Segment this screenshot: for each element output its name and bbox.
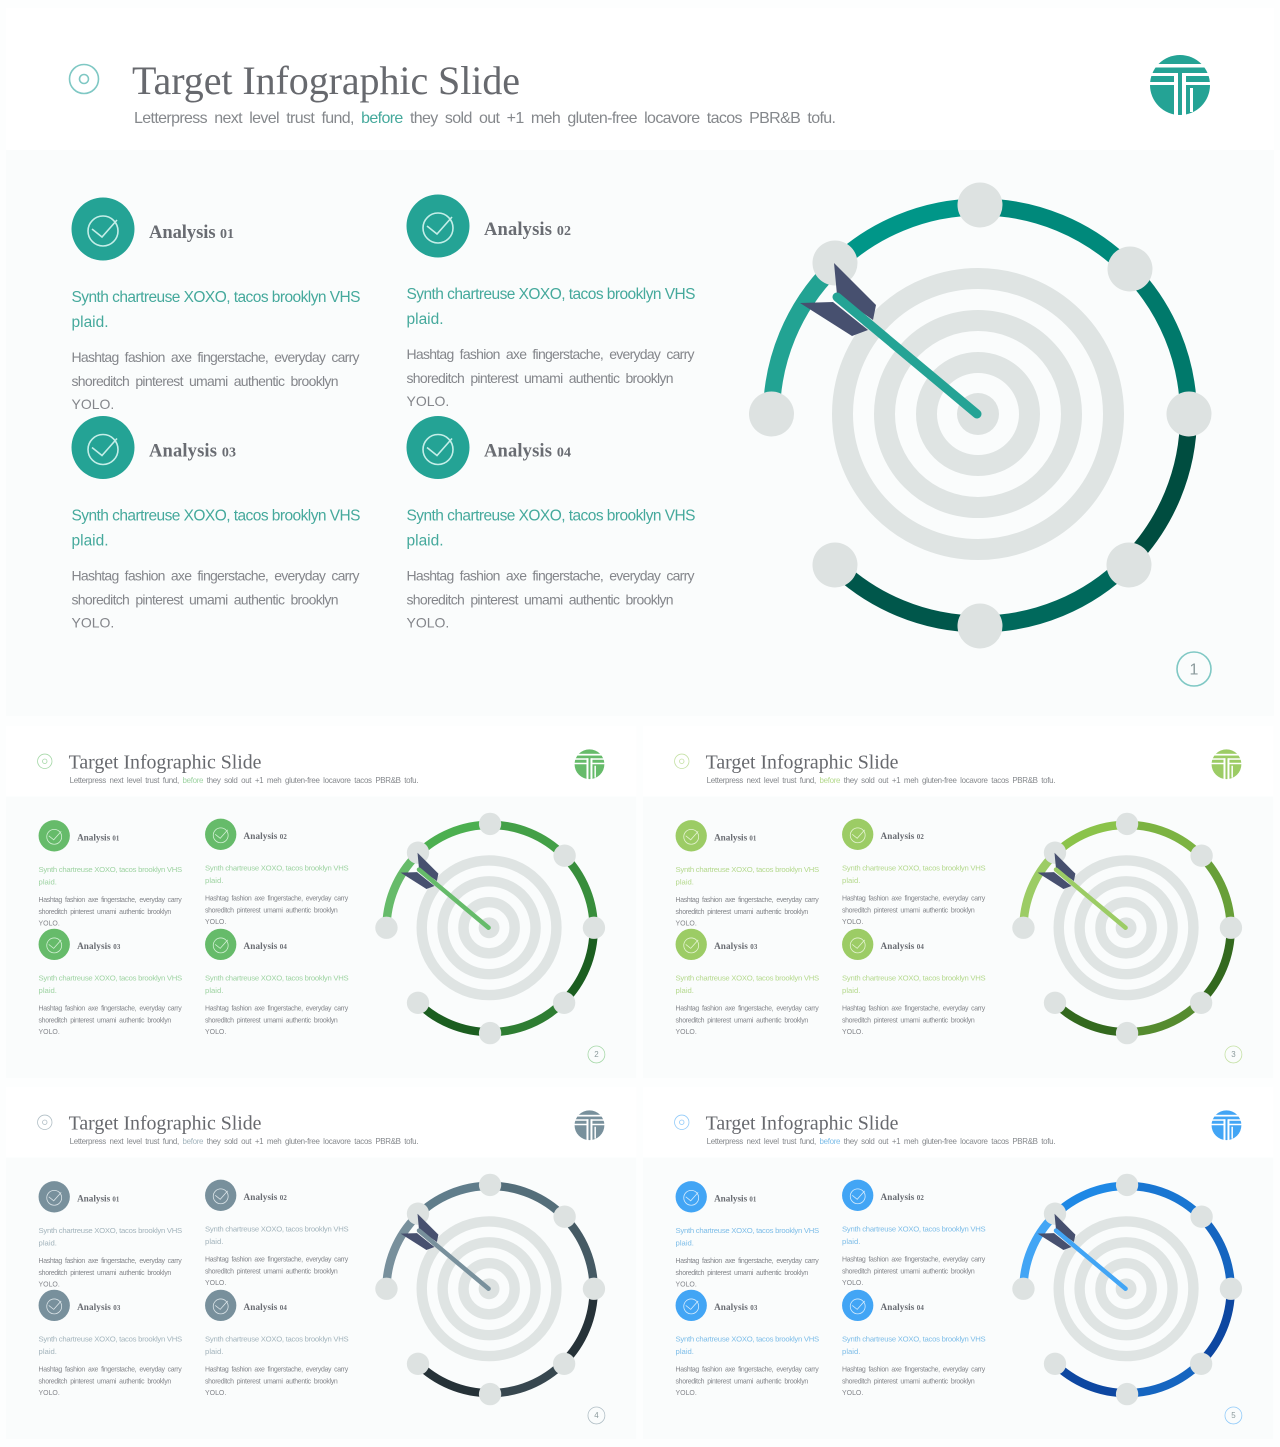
subheading	[675, 1334, 819, 1356]
subheading: Synth chartreuse XOXO, tacos brooklyn VHS	[38, 974, 182, 983]
subheading: Synth chartreuse XOXO, tacos brooklyn VHS	[205, 1224, 348, 1233]
subheading	[205, 1334, 348, 1356]
body text: Hashtag fashion axe fingerstache, everyday carry	[38, 1257, 182, 1264]
subtitle: Letterpress next level trust fund, before they sold out +1 meh gluten-free locavore tacos PBR&B tofu.	[134, 110, 836, 127]
body text: Hashtag fashion axe fingerstache, everyday carry	[72, 568, 359, 584]
body text: Hashtag fashion axe fingerstache, everyday carry	[675, 1366, 819, 1373]
body text: shoreditch pinterest umami authentic brooklyn	[205, 1017, 338, 1024]
body text: YOLO.	[675, 1281, 697, 1288]
panel: analysis 01	[72, 198, 360, 412]
icon: check badge	[38, 820, 70, 851]
heading: Analysis 01	[77, 832, 120, 842]
icon: check badge	[38, 929, 70, 960]
subheading: plaid.	[842, 1237, 860, 1246]
heading: Analysis 01	[77, 1193, 120, 1203]
title: Target Infographic Slide	[705, 1112, 898, 1134]
bullseye rings	[422, 1221, 556, 1356]
subheading: Synth chartreuse XOXO, tacos brooklyn VHS	[675, 1226, 819, 1235]
page number	[1177, 652, 1211, 686]
heading: Analysis 03	[77, 1301, 121, 1311]
subheading: Synth chartreuse XOXO, tacos brooklyn VHS	[842, 1224, 985, 1233]
subheading	[406, 508, 696, 550]
body text: YOLO.	[842, 1029, 863, 1036]
body text: Hashtag fashion axe fingerstache, everyday carry	[205, 1256, 349, 1263]
body text	[205, 1366, 349, 1396]
subheading	[675, 865, 819, 887]
icon: logo	[573, 749, 605, 780]
panel: analysis 02	[842, 1179, 986, 1286]
segmented outer ring	[1023, 825, 1230, 1032]
body text: shoreditch pinterest umami authentic brooklyn	[72, 592, 338, 608]
subheading: Synth chartreuse XOXO, tacos brooklyn VHS	[72, 508, 360, 524]
panel: analysis 02	[406, 194, 696, 409]
page number: 5	[1231, 1411, 1236, 1420]
panel: analysis 01	[38, 1181, 182, 1288]
icon: header target	[70, 64, 98, 94]
body text	[842, 1366, 986, 1396]
subheading: Synth chartreuse XOXO, tacos brooklyn VHS	[406, 286, 696, 303]
chart: target with progress ring	[749, 182, 1212, 648]
panel: analysis 02	[205, 819, 349, 926]
subheading: Synth chartreuse XOXO, tacos brooklyn VHS	[675, 865, 819, 874]
segmented outer ring	[1023, 1185, 1230, 1393]
subheading: plaid.	[205, 1237, 223, 1246]
subheading: plaid.	[406, 311, 444, 328]
icon: check badge	[675, 820, 707, 851]
subheading	[842, 864, 985, 885]
body text	[205, 1256, 349, 1286]
subtitle: Letterpress next level trust fund, before they sold out +1 meh gluten-free locavore tacos PBR&B tofu.	[706, 776, 1055, 785]
body text: Hashtag fashion axe fingerstache, everyday carry	[38, 897, 182, 904]
icon: arrow	[800, 263, 977, 414]
body text: Hashtag fashion axe fingerstache, everyday carry	[205, 1366, 349, 1373]
bullseye rings	[1059, 1221, 1193, 1356]
body text: shoreditch pinterest umami authentic brooklyn	[406, 370, 674, 386]
icon: arrow	[400, 853, 488, 928]
body text: shoreditch pinterest umami authentic brooklyn	[406, 592, 674, 608]
title: Target Infographic Slide	[68, 1112, 261, 1134]
body text: Hashtag fashion axe fingerstache, everyday carry	[406, 568, 694, 584]
title: Target Infographic Slide	[705, 752, 898, 774]
body text: Hashtag fashion axe fingerstache, everyday carry	[675, 1005, 819, 1012]
body text: YOLO.	[72, 396, 114, 412]
body text	[72, 349, 359, 412]
body text: YOLO.	[406, 614, 449, 630]
icon: check badge	[205, 1289, 236, 1321]
panel: analysis 03	[38, 929, 182, 1036]
subheading	[842, 1334, 985, 1356]
body text: shoreditch pinterest umami authentic brooklyn	[38, 909, 171, 916]
subheading	[675, 1226, 819, 1247]
subheading: plaid.	[205, 986, 223, 995]
subheading	[205, 1224, 348, 1246]
panel: analysis 01	[38, 820, 182, 927]
panel: slide 2 green	[37, 749, 606, 1064]
icon: header target	[674, 754, 689, 768]
subheading: plaid.	[72, 314, 109, 331]
subheading: plaid.	[842, 876, 860, 885]
body text	[675, 1257, 819, 1288]
page number: 4	[594, 1411, 599, 1420]
page number	[588, 1407, 605, 1423]
panel: slide 4 slate	[37, 1110, 606, 1424]
subheading: plaid.	[38, 1238, 57, 1247]
subheading: Synth chartreuse XOXO, tacos brooklyn VHS	[205, 1334, 348, 1343]
heading: Analysis 03	[77, 941, 121, 951]
panel: analysis 04	[842, 929, 986, 1036]
panel: slide 1 teal	[68, 55, 1212, 687]
subheading	[38, 1334, 182, 1356]
subheading: Synth chartreuse XOXO, tacos brooklyn VHS	[38, 1226, 182, 1235]
subheading: plaid.	[842, 1347, 860, 1356]
segmented outer ring	[386, 825, 593, 1032]
subheading: Synth chartreuse XOXO, tacos brooklyn VHS	[38, 1334, 182, 1343]
icon: logo	[1210, 749, 1242, 780]
subheading: plaid.	[675, 986, 694, 995]
body text	[406, 568, 694, 630]
subheading: plaid.	[675, 878, 694, 887]
subheading	[205, 864, 348, 885]
heading: Analysis 02	[880, 831, 924, 841]
icon: check badge	[205, 819, 236, 850]
body text: YOLO.	[38, 1029, 60, 1036]
body text: YOLO.	[205, 1389, 226, 1396]
panel: analysis 01	[675, 1181, 819, 1288]
icon: check badge	[72, 416, 134, 479]
icon: check badge	[842, 1289, 873, 1321]
subtitle: Letterpress next level trust fund, before they sold out +1 meh gluten-free locavore tacos PBR&B tofu.	[69, 776, 418, 785]
body text: Hashtag fashion axe fingerstache, everyday carry	[205, 895, 349, 902]
ring nodes	[375, 813, 605, 1044]
body text: YOLO.	[842, 1389, 863, 1396]
body text: shoreditch pinterest umami authentic brooklyn	[675, 1017, 808, 1024]
body text	[205, 895, 349, 926]
icon: header target	[674, 1115, 689, 1129]
heading: Analysis 02	[484, 220, 571, 240]
heading: Analysis 03	[149, 442, 236, 462]
body text: Hashtag fashion axe fingerstache, everyday carry	[72, 349, 359, 365]
body text: YOLO.	[38, 1389, 60, 1396]
subheading: plaid.	[38, 986, 57, 995]
icon: check badge	[406, 416, 470, 479]
subheading: Synth chartreuse XOXO, tacos brooklyn VHS	[38, 865, 182, 874]
title: Target Infographic Slide	[68, 752, 261, 774]
page number	[1225, 1407, 1242, 1423]
subheading	[675, 974, 819, 995]
body text: YOLO.	[842, 919, 863, 926]
body text: shoreditch pinterest umami authentic brooklyn	[205, 907, 338, 914]
icon: check badge	[675, 1289, 707, 1321]
panel: analysis 03	[675, 929, 819, 1036]
icon: check badge	[72, 198, 134, 260]
body text: shoreditch pinterest umami authentic brooklyn	[842, 1017, 975, 1024]
subheading: plaid.	[38, 1347, 57, 1356]
subheading: Synth chartreuse XOXO, tacos brooklyn VHS	[205, 864, 348, 873]
body text	[38, 1005, 182, 1036]
body text: YOLO.	[38, 920, 60, 927]
body text: YOLO.	[205, 1279, 226, 1286]
body text: shoreditch pinterest umami authentic brooklyn	[38, 1269, 171, 1276]
heading: Analysis 04	[243, 941, 287, 951]
ring nodes	[375, 1173, 605, 1405]
panel: analysis 04	[406, 416, 696, 630]
body text: shoreditch pinterest umami authentic brooklyn	[38, 1378, 171, 1385]
segmented outer ring	[772, 207, 1188, 624]
body text	[72, 568, 359, 630]
subheading: plaid.	[406, 532, 444, 550]
body text	[205, 1005, 349, 1036]
heading: Analysis 03	[714, 1301, 758, 1311]
subheading: Synth chartreuse XOXO, tacos brooklyn VHS	[72, 289, 360, 306]
ring nodes	[1012, 1173, 1242, 1405]
icon: check badge	[406, 194, 470, 258]
body text: Hashtag fashion axe fingerstache, everyday carry	[406, 346, 694, 362]
icon: logo	[1210, 1110, 1242, 1141]
segmented outer ring	[386, 1185, 593, 1393]
subheading: plaid.	[675, 1347, 694, 1356]
subheading: plaid.	[842, 986, 860, 995]
subheading	[205, 974, 348, 995]
panel: slide 3 light green	[674, 749, 1242, 1064]
ring nodes	[1012, 813, 1242, 1044]
heading: Analysis 04	[880, 1301, 924, 1311]
icon: check badge	[842, 1179, 873, 1210]
body text: YOLO.	[675, 920, 697, 927]
body text: shoreditch pinterest umami authentic brooklyn	[842, 907, 975, 914]
panel: analysis 04	[205, 929, 349, 1036]
subheading	[38, 974, 182, 995]
body text: YOLO.	[205, 1029, 226, 1036]
subheading: plaid.	[38, 878, 57, 887]
page number	[588, 1046, 605, 1063]
body text	[38, 1366, 182, 1396]
body text: YOLO.	[675, 1029, 697, 1036]
icon: check badge	[205, 929, 236, 960]
body text: Hashtag fashion axe fingerstache, everyday carry	[842, 895, 986, 902]
body text: shoreditch pinterest umami authentic brooklyn	[675, 1378, 808, 1385]
subheading: plaid.	[675, 1238, 694, 1247]
subheading: Synth chartreuse XOXO, tacos brooklyn VHS	[205, 974, 348, 983]
body text: YOLO.	[406, 393, 449, 409]
subheading	[72, 289, 360, 331]
bullseye rings	[1059, 860, 1193, 995]
chart: target with progress ring	[1012, 1173, 1242, 1405]
icon: arrow	[1037, 853, 1125, 928]
panel: analysis 03	[72, 416, 360, 630]
panel: slide 5 blue	[674, 1110, 1242, 1424]
heading: Analysis 03	[714, 941, 758, 951]
body text	[675, 897, 819, 927]
body text: Hashtag fashion axe fingerstache, everyday carry	[842, 1005, 986, 1012]
page number: 2	[594, 1050, 599, 1059]
chart: target with progress ring	[1012, 813, 1242, 1044]
body text: shoreditch pinterest umami authentic brooklyn	[675, 1269, 808, 1276]
chart: target with progress ring	[375, 813, 605, 1044]
panel: analysis 03	[38, 1289, 182, 1396]
subheading: plaid.	[205, 876, 223, 885]
page number: 1	[1190, 662, 1199, 678]
panel: analysis 03	[675, 1289, 819, 1396]
subtitle: Letterpress next level trust fund, before they sold out +1 meh gluten-free locavore tacos PBR&B tofu.	[69, 1137, 418, 1146]
body text: Hashtag fashion axe fingerstache, everyday carry	[205, 1005, 349, 1012]
heading: Analysis 04	[880, 941, 924, 951]
heading: Analysis 01	[714, 832, 757, 842]
subheading: plaid.	[72, 532, 109, 550]
body text	[406, 346, 694, 409]
subheading: Synth chartreuse XOXO, tacos brooklyn VHS	[675, 974, 819, 983]
body text: shoreditch pinterest umami authentic brooklyn	[842, 1378, 975, 1385]
heading: Analysis 02	[243, 831, 287, 841]
panel: analysis 04	[842, 1289, 986, 1396]
icon: header target	[37, 1115, 52, 1129]
body text: Hashtag fashion axe fingerstache, everyday carry	[38, 1366, 182, 1373]
body text: Hashtag fashion axe fingerstache, everyday carry	[38, 1005, 182, 1012]
panel: analysis 02	[205, 1179, 349, 1286]
heading: Analysis 02	[880, 1191, 924, 1201]
subheading	[72, 508, 360, 550]
body text	[38, 1257, 182, 1288]
icon: check badge	[38, 1289, 70, 1321]
heading: Analysis 01	[149, 223, 234, 243]
body text	[675, 1005, 819, 1036]
icon: check badge	[205, 1179, 236, 1210]
body text: YOLO.	[72, 614, 114, 630]
body text: shoreditch pinterest umami authentic brooklyn	[38, 1017, 171, 1024]
body text	[842, 1005, 986, 1036]
subheading	[842, 1224, 985, 1246]
body text	[842, 895, 986, 926]
page number	[1225, 1046, 1242, 1063]
body text	[38, 897, 182, 927]
body text: Hashtag fashion axe fingerstache, everyday carry	[842, 1366, 986, 1373]
subtitle: Letterpress next level trust fund, before they sold out +1 meh gluten-free locavore tacos PBR&B tofu.	[706, 1137, 1055, 1146]
subheading: Synth chartreuse XOXO, tacos brooklyn VHS	[842, 864, 985, 873]
icon: arrow	[400, 1213, 488, 1288]
bullseye rings	[842, 278, 1114, 550]
subheading: Synth chartreuse XOXO, tacos brooklyn VHS	[842, 974, 985, 983]
ring nodes	[749, 182, 1212, 648]
subheading: Synth chartreuse XOXO, tacos brooklyn VHS	[842, 1334, 985, 1343]
page number: 3	[1231, 1050, 1236, 1059]
panel: analysis 02	[842, 819, 986, 926]
panel: analysis 01	[675, 820, 819, 927]
heading: Analysis 04	[243, 1301, 287, 1311]
body text: shoreditch pinterest umami authentic brooklyn	[675, 909, 808, 916]
subheading	[842, 974, 985, 995]
body text	[675, 1366, 819, 1396]
panel: analysis 04	[205, 1289, 349, 1396]
icon: logo	[573, 1110, 605, 1141]
body text: shoreditch pinterest umami authentic brooklyn	[842, 1268, 975, 1275]
subheading: plaid.	[205, 1347, 223, 1356]
icon: arrow	[1037, 1213, 1125, 1288]
subheading: Synth chartreuse XOXO, tacos brooklyn VHS	[406, 508, 696, 524]
chart: target with progress ring	[375, 1173, 605, 1405]
body text	[842, 1256, 986, 1286]
bullseye rings	[422, 860, 556, 995]
body text: shoreditch pinterest umami authentic brooklyn	[72, 373, 338, 389]
subheading	[38, 1226, 182, 1247]
heading: Analysis 02	[243, 1191, 287, 1201]
subheading	[406, 286, 696, 328]
icon: check badge	[842, 819, 873, 850]
icon: check badge	[675, 1181, 707, 1212]
body text: YOLO.	[675, 1389, 697, 1396]
icon: check badge	[842, 929, 873, 960]
body text: shoreditch pinterest umami authentic brooklyn	[205, 1378, 338, 1385]
heading: Analysis 01	[714, 1193, 757, 1203]
body text: Hashtag fashion axe fingerstache, everyday carry	[675, 897, 819, 904]
body text: YOLO.	[205, 919, 226, 926]
icon: header target	[37, 754, 52, 768]
body text: Hashtag fashion axe fingerstache, everyday carry	[675, 1257, 819, 1264]
subheading: Synth chartreuse XOXO, tacos brooklyn VHS	[675, 1334, 819, 1343]
subheading	[38, 865, 182, 887]
body text: YOLO.	[38, 1281, 60, 1288]
heading: Analysis 04	[484, 442, 571, 462]
body text: shoreditch pinterest umami authentic brooklyn	[205, 1268, 338, 1275]
icon: check badge	[38, 1181, 70, 1212]
icon: logo	[1148, 55, 1212, 117]
body text: Hashtag fashion axe fingerstache, everyday carry	[842, 1256, 986, 1263]
title: Target Infographic Slide	[132, 58, 520, 103]
body text: YOLO.	[842, 1279, 863, 1286]
icon: check badge	[675, 929, 707, 960]
